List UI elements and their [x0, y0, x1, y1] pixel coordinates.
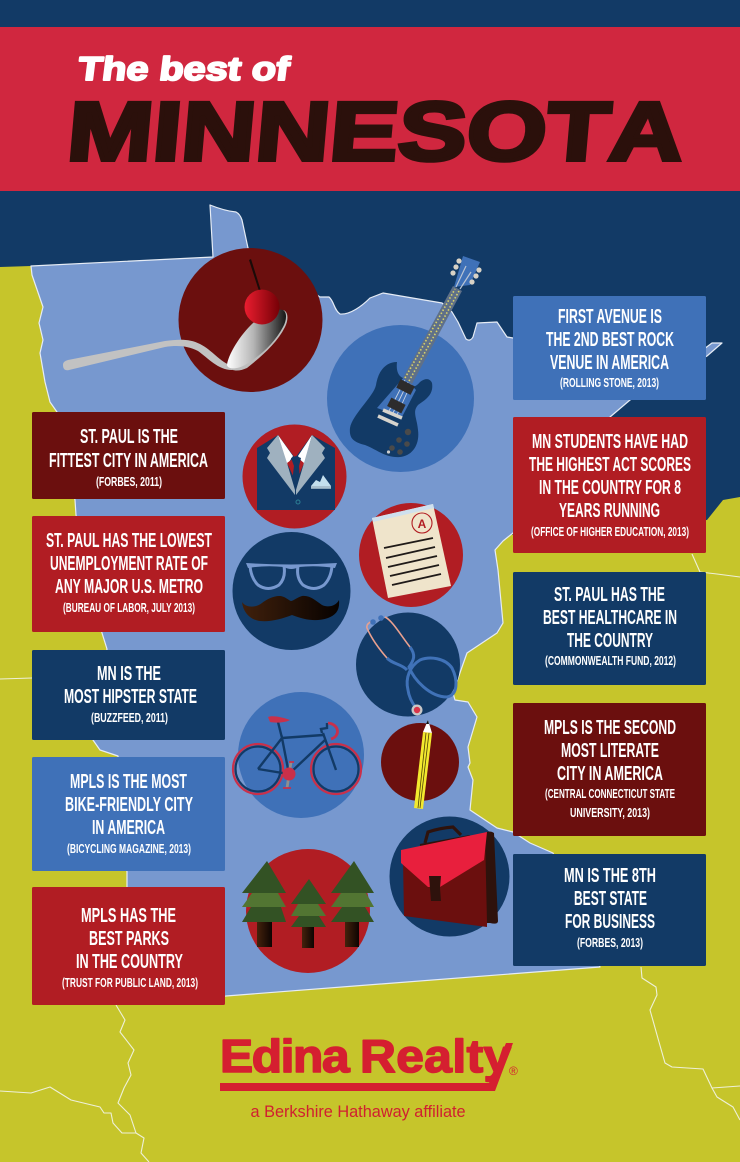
callout: best state for business [513, 854, 706, 966]
callout: literate city: UNIVERSITY, 2013) [570, 806, 650, 820]
callout: bike-friendly: MPLS IS THE MOST [70, 771, 187, 793]
icon: bicycle [233, 692, 364, 818]
callout: unemployment: (BUREAU OF LABOR, JULY 2013) [63, 601, 195, 615]
title: Minnesota: MINNESOTA [64, 85, 688, 178]
title: The best of: The best of [76, 50, 293, 87]
callout: literate city: CITY IN AMERICA [557, 763, 663, 785]
callout: literate city: MOST LITERATE [561, 740, 659, 762]
callout: literate city [513, 703, 706, 836]
icon: briefcase [390, 816, 510, 936]
callout: healthcare [513, 572, 706, 685]
callout: rock venue: VENUE IN AMERICA [550, 352, 669, 374]
callout: best parks: BEST PARKS [89, 928, 169, 950]
callout: bike-friendly: IN AMERICA [92, 817, 165, 839]
callout: fittest city: FITTEST CITY IN AMERICA [49, 450, 208, 472]
logo: Edina Realty [220, 1032, 518, 1121]
callout: hipster state: MOST HIPSTER STATE [64, 686, 197, 708]
tagline: a Berkshire Hathaway affiliate [250, 1103, 466, 1121]
logo: Edina Realty: Realty [360, 1032, 512, 1083]
callout: unemployment [32, 516, 225, 632]
callout: hipster state: (BUZZFEED, 2011) [91, 711, 168, 725]
callout: best parks: (TRUST FOR PUBLIC LAND, 2013) [62, 976, 198, 990]
callout: best state for business: (FORBES, 2013) [577, 936, 643, 950]
callout: best parks: IN THE COUNTRY [76, 951, 183, 973]
callout: rock venue [513, 296, 706, 400]
callout: unemployment: ST. PAUL HAS THE LOWEST [46, 530, 212, 552]
icon: suit [242, 424, 346, 528]
callout: best state for business: BEST STATE [574, 888, 647, 910]
callout: bike-friendly: BIKE-FRIENDLY CITY [65, 794, 193, 816]
icon: cherry on spoon [63, 248, 322, 392]
callout: healthcare: (COMMONWEALTH FUND, 2012) [545, 654, 676, 668]
callout: rock venue: (ROLLING STONE, 2013) [560, 376, 659, 390]
callout: best parks [32, 887, 225, 1005]
icon: graded paper: A [418, 517, 427, 531]
callout: bike-friendly: (BICYCLING MAGAZINE, 2013) [67, 842, 191, 856]
logo: Edina Realty: Edina [220, 1032, 350, 1083]
callout: best parks: MPLS HAS THE [81, 905, 176, 927]
icon: pencil [381, 720, 459, 809]
callout: fittest city [32, 412, 225, 499]
callout: unemployment: ANY MAJOR U.S. METRO [55, 576, 203, 598]
callout: best state for business: FOR BUSINESS [565, 911, 655, 933]
map: Canada and Lake Superior [0, 0, 740, 535]
icon: guitar [327, 256, 482, 472]
callout: ACT scores [513, 417, 706, 553]
logo: Edina Realty: ® [509, 1064, 518, 1078]
title banner [0, 27, 740, 191]
callout: best state for business: MN IS THE 8TH [564, 865, 656, 887]
icon: glasses and mustache [232, 532, 350, 650]
callout: fittest city: (FORBES, 2011) [96, 475, 162, 489]
callout: literate city: (CENTRAL CONNECTICUT STATE [545, 787, 675, 801]
callout: ACT scores: YEARS RUNNING [559, 500, 660, 522]
callout: healthcare: THE COUNTRY [567, 630, 653, 652]
map: Minnesota [31, 205, 722, 1000]
callout: hipster state: MN IS THE [97, 663, 161, 685]
callout: hipster state [32, 650, 225, 740]
icon: pine trees [242, 849, 374, 973]
callout: unemployment: UNEMPLOYMENT RATE OF [50, 553, 208, 575]
callout: bike-friendly [32, 757, 225, 871]
callout: fittest city: ST. PAUL IS THE [80, 426, 178, 448]
icon: stethoscope [356, 612, 460, 716]
icon: graded paper [359, 503, 463, 607]
callout: rock venue: FIRST AVENUE IS [558, 306, 662, 328]
map: state border lines [0, 554, 740, 1162]
callout: healthcare: ST. PAUL HAS THE [554, 584, 665, 606]
